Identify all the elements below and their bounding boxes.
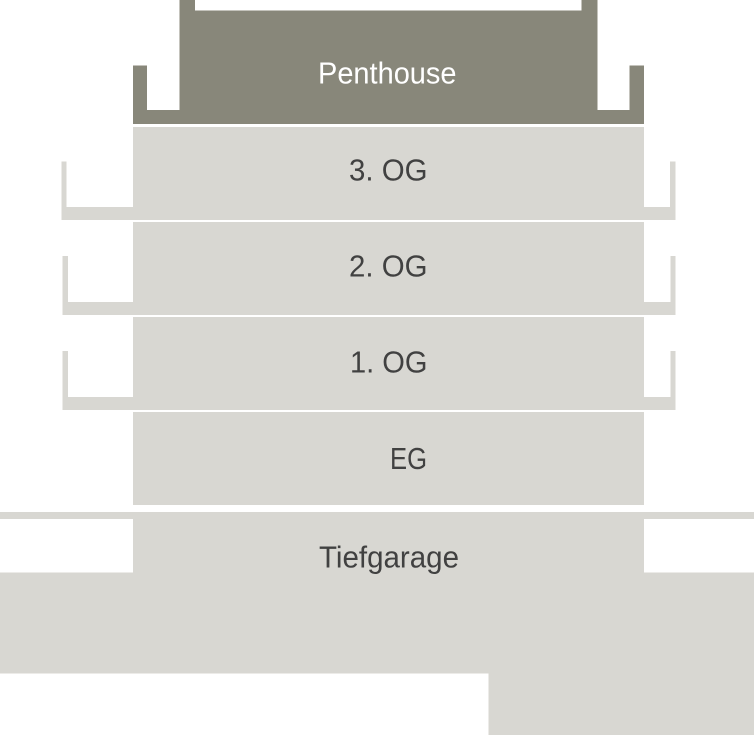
floor: EG: EG — [390, 441, 427, 476]
floor: Penthouse: Penthouse — [318, 56, 456, 90]
floor: 2. OG — [62, 222, 676, 315]
floor: Tiefgarage with ground: Tiefgarage — [319, 540, 459, 575]
floor: 1. OG: 1. OG — [350, 344, 428, 380]
floor: 1. OG — [62, 317, 676, 410]
floor: 3. OG: 3. OG — [349, 152, 428, 188]
floor: 3. OG — [62, 127, 676, 220]
floor: Penthouse — [133, 0, 644, 124]
floor: EG — [133, 412, 644, 505]
floor: 2. OG: 2. OG — [349, 248, 428, 284]
